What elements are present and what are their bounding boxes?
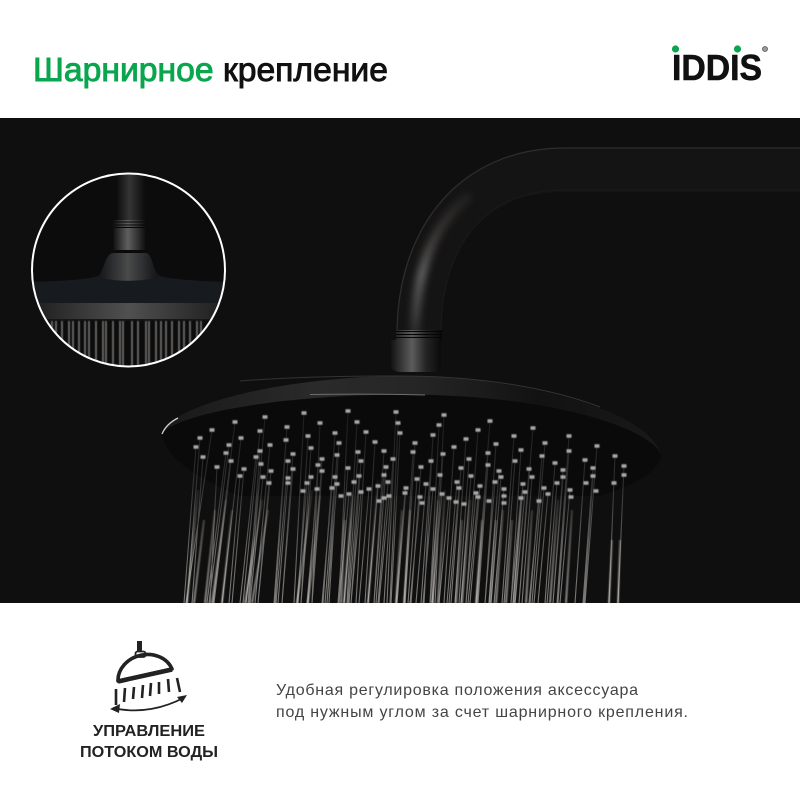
inset circle: hinge detail (30, 170, 230, 368)
icon: adjustable shower head (110, 641, 187, 713)
shower arm (397, 148, 800, 340)
water streams (184, 411, 624, 603)
title: Шарнирное крепление (33, 51, 388, 88)
shower head disc (162, 376, 660, 451)
inset disc (34, 270, 223, 303)
icon caption: УПРАВЛЕНИЕ (93, 723, 205, 740)
description text: под нужным углом за счет шарнирного крепления. (276, 704, 688, 721)
logo: IDDIS: IDDIS (672, 47, 762, 88)
inset pipe (119, 174, 142, 220)
inset collar (114, 220, 144, 250)
inset rim (39, 303, 218, 319)
nozzles (194, 411, 626, 504)
description text (276, 682, 688, 721)
arm collar (391, 330, 442, 372)
photo panel: shower head (0, 118, 800, 603)
icon caption (80, 723, 218, 761)
icon caption: ПОТОКОМ ВОДЫ (80, 744, 218, 761)
description text: Удобная регулировка положения аксессуара (276, 682, 638, 699)
inset water (52, 321, 201, 368)
